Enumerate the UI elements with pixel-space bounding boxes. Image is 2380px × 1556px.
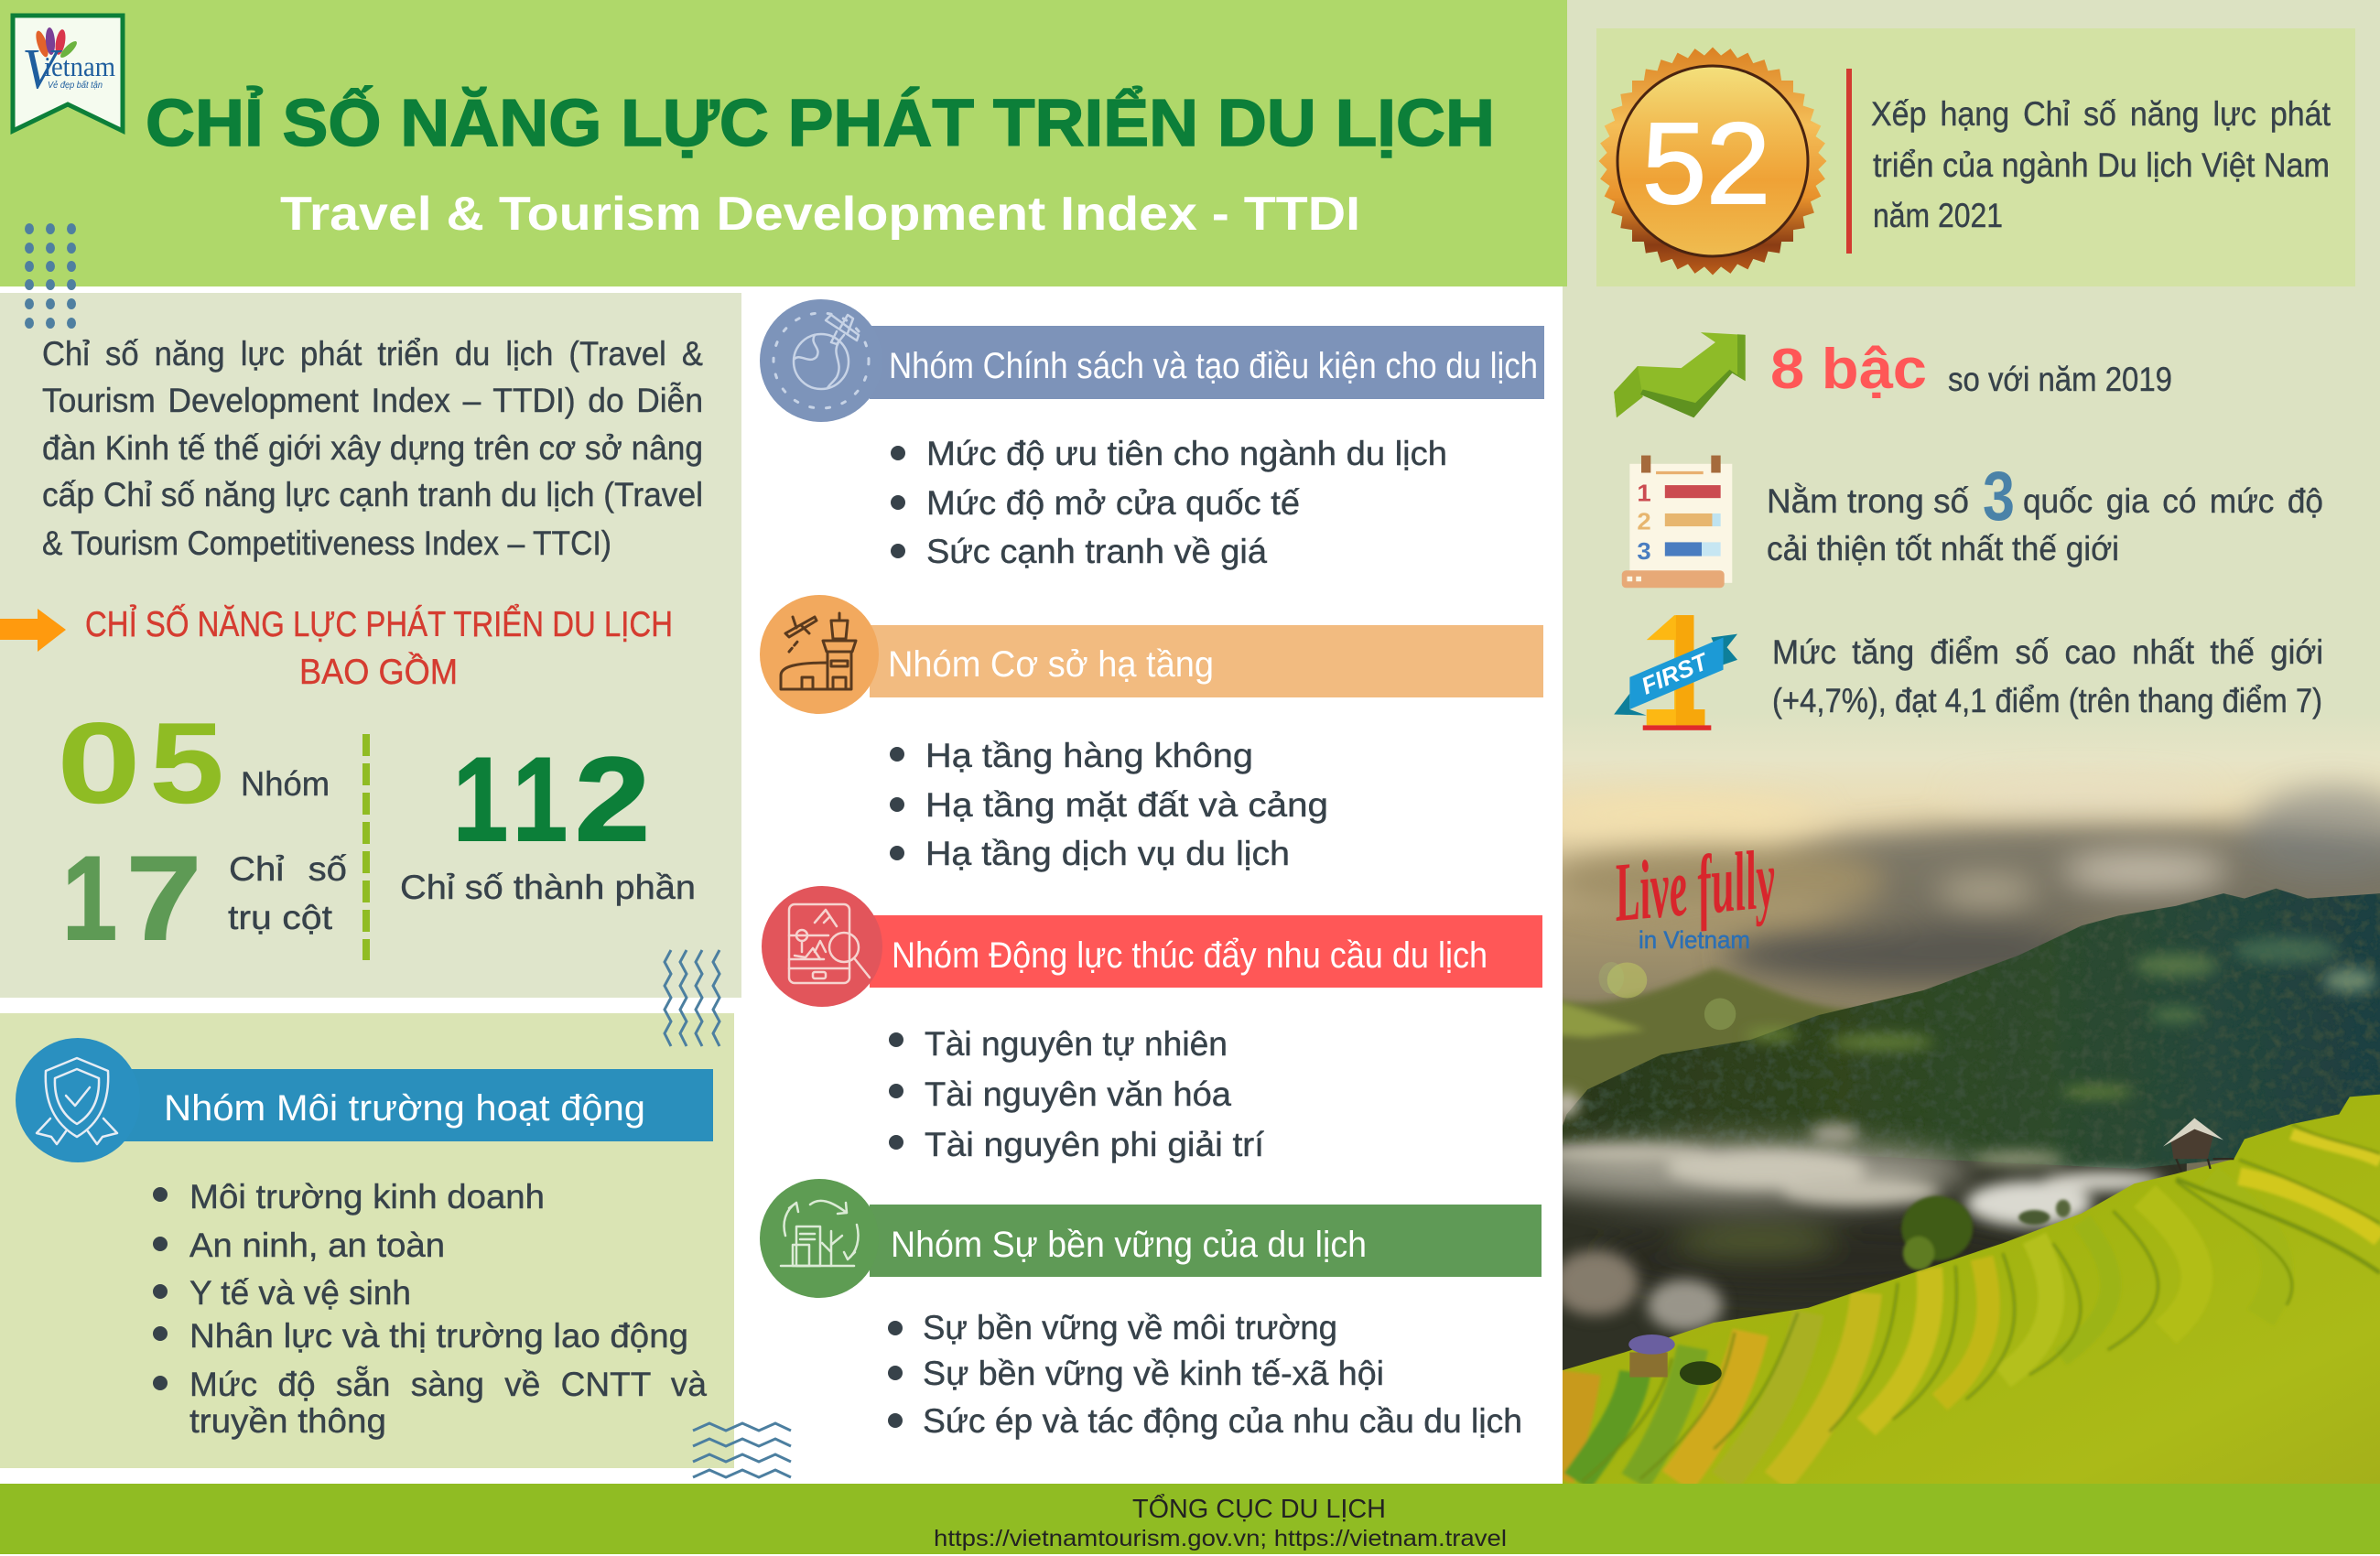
logo: Vietnam ribbon: Vẻ đẹp bất tận (48, 80, 103, 91)
panel: sustainability group (760, 1179, 1542, 1440)
intro paragraph: Tourism Development Index – TTDI) do Diễn (42, 382, 703, 419)
bullet list: Sự bền vững về kinh tế-xã hội (923, 1355, 1384, 1392)
bullet list: Sức ép và tác động của nhu cầu du lịch (923, 1402, 1522, 1440)
photo: mist (1563, 1121, 1983, 1264)
bullet list: Môi trường kinh doanh (189, 1178, 545, 1216)
bullet list: truyền thông (189, 1402, 386, 1440)
group heading: Nhóm Sự bền vững của du lịch (891, 1225, 1367, 1265)
icon: first place (1614, 615, 1737, 730)
intro paragraph (42, 335, 703, 562)
stat: 17 pillars: 7 (126, 831, 201, 965)
title: CHỈ SỐ NĂNG LỰC PHÁT TRIỂN DU LỊCH (146, 85, 1495, 160)
arrow: orange (0, 609, 66, 652)
bullet list: Tài nguyên văn hóa (925, 1075, 1231, 1113)
stat: 05 groups: 0 (57, 698, 141, 827)
heading: red: BAO GỒM (299, 652, 458, 692)
photo: rice terraces (1551, 1089, 2380, 1486)
photo: lower valley (1556, 1144, 2187, 1372)
group heading: Nhóm Môi trường hoạt động (164, 1088, 645, 1129)
stat: highest score increase: (+4,7%), đạt 4,1 điểm (trên thang điểm 7) (1772, 682, 2322, 719)
logo: Vietnam ribbon (13, 16, 123, 131)
icon: gold medal: 52 (1642, 99, 1770, 228)
bullet list (888, 1309, 1522, 1440)
stat: 112 indicators (400, 732, 696, 906)
stat: 17 pillars: 1 (62, 831, 117, 965)
stat: 05 groups: Nhóm (241, 765, 330, 803)
icon: green arrow (1614, 332, 1746, 417)
bullet list (891, 435, 1447, 570)
decoration: horizontal waves (693, 1423, 791, 1477)
photo: large hut (2163, 1118, 2234, 1172)
logo: Vietnam ribbon: ietnam (44, 50, 115, 82)
bullet list: Sức cạnh tranh về giá (926, 533, 1267, 570)
intro paragraph: cấp Chỉ số năng lực cạnh tranh du lịch (Travel (42, 476, 703, 513)
panel: right column background (1563, 0, 2380, 1484)
icon: ranking list (1622, 456, 1732, 588)
stat: top 3 countries: 3 (1983, 458, 2015, 535)
bullet list: Sự bền vững về môi trường (923, 1309, 1337, 1346)
intro paragraph: & Tourism Competitiveness Index – TTCI) (42, 524, 611, 562)
photo: rice terraces and mountains (1509, 712, 2380, 1486)
stat: top 3 countries (1622, 456, 2323, 588)
photo: tree (1901, 1196, 2071, 1270)
icon: globe and plane (760, 299, 882, 422)
footer: https://vietnamtourism.gov.vn; https://vietnam.travel (934, 1526, 1507, 1551)
bullet list: Hạ tầng dịch vụ du lịch (925, 835, 1290, 872)
photo: lens flares (1598, 962, 1736, 1030)
bullet list: An ninh, an toàn (189, 1226, 445, 1264)
icon: sustainable building (760, 1179, 879, 1298)
rank description: triển của ngành Du lịch Việt Nam (1873, 146, 2330, 184)
bullet list: Hạ tầng mặt đất và cảng (925, 786, 1328, 824)
decoration: vertical waves (665, 950, 719, 1046)
photo: small hut (1628, 1334, 1722, 1385)
rank description: năm 2021 (1873, 197, 2003, 234)
bullet list: Hạ tầng hàng không (925, 737, 1253, 774)
heading: red (85, 603, 673, 692)
stat: 17 pillars: trụ cột (228, 899, 333, 936)
stat: 17 pillars: Chỉ số (229, 850, 347, 888)
stat: up 8 ranks: 8 bậc (1770, 338, 1927, 401)
panel: infrastructure group (760, 595, 1543, 872)
heading: red: CHỈ SỐ NĂNG LỰC PHÁT TRIỂN DU LỊCH (85, 603, 673, 644)
stat: 17 pillars (62, 831, 347, 965)
panel: policy group (760, 299, 1544, 570)
header band (0, 0, 1567, 286)
bullet list (890, 737, 1328, 872)
slogan: Live fully in Vietnam: Live fully (1609, 832, 1780, 939)
icon: map and magnifier (762, 886, 882, 1007)
intro paragraph: Chỉ số năng lực phát triển du lịch (Travel & (42, 335, 703, 373)
bullet list: Mức độ sẵn sàng về CNTT và (189, 1366, 707, 1403)
stat: 112 indicators: 1 (453, 732, 508, 866)
logo: Vietnam ribbon: V (22, 38, 62, 101)
icon: ranking list: 3 (1637, 538, 1651, 565)
bullet list: Mức độ mở cửa quốc tế (926, 484, 1300, 522)
bullet list: Tài nguyên phi giải trí (925, 1126, 1265, 1163)
stat: 112 indicators: Chỉ số thành phần (400, 869, 696, 906)
stat: 05 groups (57, 698, 330, 827)
group heading: Nhóm Cơ sở hạ tầng (888, 644, 1214, 685)
icon: gold medal (1593, 41, 1833, 281)
bullet list: Y tế và vệ sinh (189, 1274, 411, 1312)
decoration: dot grid (25, 223, 76, 329)
slogan: Live fully in Vietnam (1609, 832, 1780, 954)
bullet list: Tài nguyên tự nhiên (925, 1025, 1228, 1063)
stat: up 8 ranks (1614, 332, 2172, 417)
stat: highest score increase (1614, 615, 2323, 730)
bullet list (153, 1178, 707, 1440)
stat: highest score increase: Mức tăng điểm số cao nhất thế giới (1772, 633, 2323, 671)
stat: top 3 countries: quốc gia có mức độ (2023, 482, 2323, 520)
rank description: Xếp hạng Chỉ số năng lực phát (1871, 95, 2331, 133)
group heading: Nhóm Động lực thúc đẩy nhu cầu du lịch (892, 935, 1488, 976)
panel: introduction and key numbers (0, 293, 741, 998)
photo: main mountain range (1556, 889, 2380, 1169)
footer: TỔNG CỤC DU LỊCH (1132, 1493, 1386, 1524)
stat: 05 groups: 5 (149, 698, 224, 827)
group heading: Nhóm Chính sách và tạo điều kiện cho du lịch (889, 346, 1538, 386)
icon: ranking list: 2 (1637, 508, 1651, 535)
bullet list: Mức độ ưu tiên cho ngành du lịch (926, 435, 1447, 472)
panel: demand drivers group (762, 886, 1542, 1163)
stat: top 3 countries: cải thiện tốt nhất thế giới (1767, 530, 2119, 567)
panel: rank 52 (1593, 28, 2355, 286)
bullet list (889, 1025, 1265, 1163)
slogan: Live fully in Vietnam: in Vietnam (1639, 926, 1750, 954)
panel: operating environment group (0, 1013, 734, 1468)
intro paragraph: đàn Kinh tế thế giới xây dựng trên cơ sở nâng (42, 429, 703, 467)
icon: ranking list: 1 (1637, 480, 1651, 506)
stat: 112 indicators: 1 (513, 732, 568, 866)
stat: up 8 ranks: so với năm 2019 (1948, 361, 2172, 398)
bullet list: Nhân lực và thị trường lao động (189, 1317, 688, 1355)
icon: airport (760, 595, 879, 714)
subtitle: Travel & Tourism Development Index - TTDI (280, 188, 1360, 241)
footer (0, 1484, 2380, 1554)
icon: first place: FIRST (1638, 647, 1713, 699)
stat: 112 indicators: 2 (575, 732, 650, 866)
rank description (1871, 95, 2331, 234)
stat: top 3 countries: Nằm trong số (1767, 482, 1969, 520)
photo: distant hills (1556, 967, 1850, 1099)
icon: shield (16, 1038, 140, 1162)
